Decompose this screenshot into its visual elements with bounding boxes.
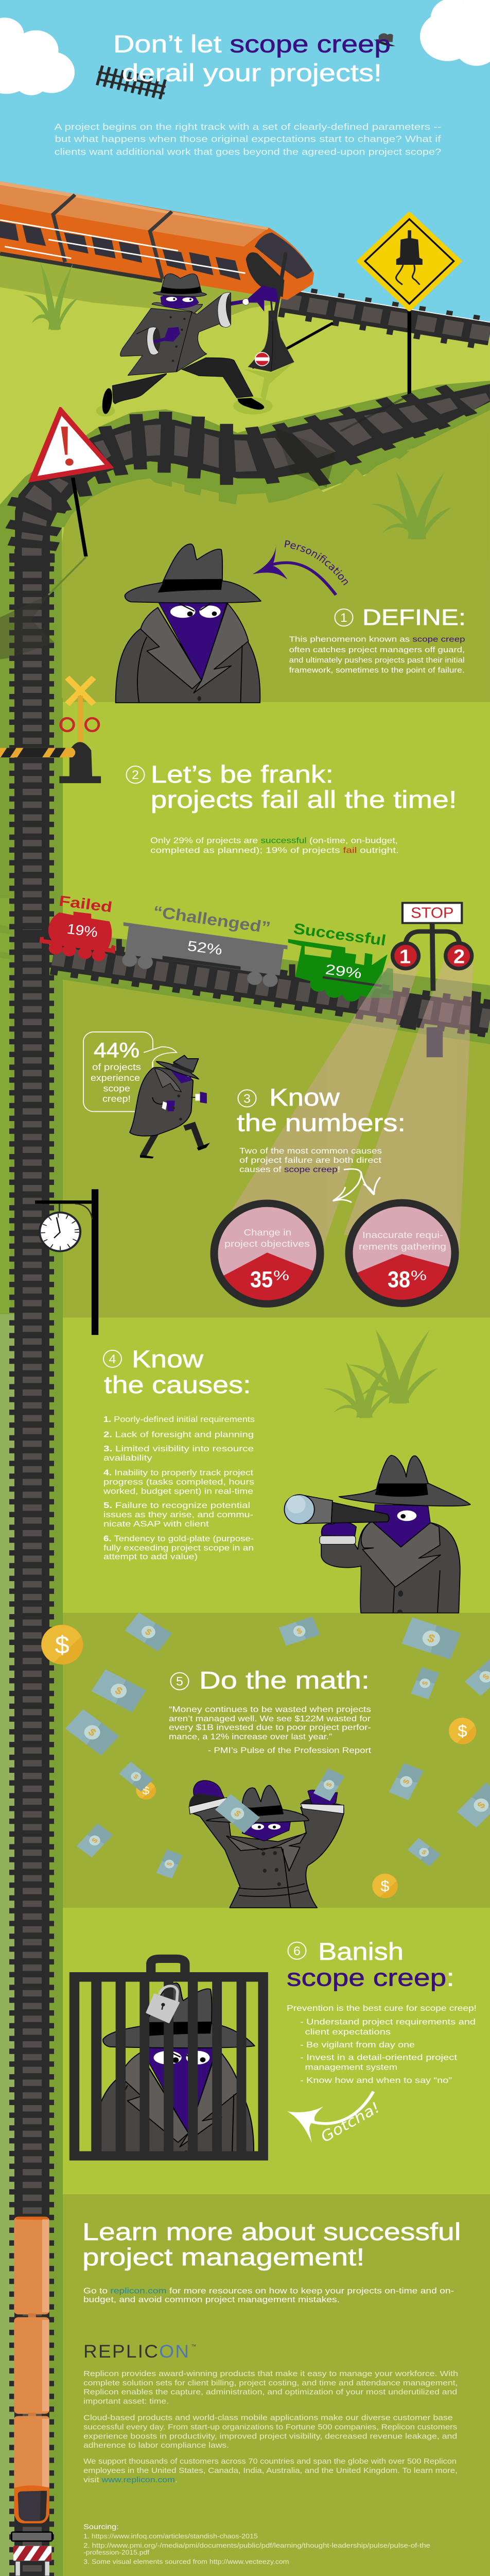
orange train [0,181,314,300]
stop signal [391,903,474,1057]
causes list: 1. Poorly-defined initial requirements [103,1415,255,1424]
gauge: inaccurate requirements gathering [345,1199,459,1307]
about Replicon: adherence to labor compliance laws. [83,2441,229,2450]
sourcing: 3. Some visual elements sourced from http://www.vecteezy.com [83,2558,289,2565]
frank body text [150,836,399,855]
about Replicon: Replicon enables the capture, administration, and optimization of your most underutilized and [83,2388,457,2396]
vertical train at track end [11,2217,52,2575]
causes list: 6. Tendency to gold-plate (purpose- [103,1534,254,1543]
prevention list: - Be vigilant from day one [300,2040,415,2049]
prevention list: - Invest in a detail-oriented project [300,2053,458,2062]
prevention list [287,2004,477,2085]
jailed spy [93,1983,255,2158]
prevention list: client expectations [305,2028,391,2037]
gotcha arrow [288,2092,373,2143]
clouds [0,0,490,95]
station clock [35,1189,98,1335]
about Replicon: important asset: time. [83,2397,169,2405]
closing heading [82,2218,461,2271]
heading 6: banish scope creep: Banish [318,1938,404,1965]
lower hill, shadow and left strip [0,381,490,706]
prevention list: - Know how and when to say “no” [300,2076,452,2085]
prevention list: - Understand project requirements and [300,2018,476,2026]
gauge: change in project objectives: 35 [250,1267,273,1292]
heading 6: banish scope creep [287,1938,454,1991]
heading 3: know the numbers: Know [269,1084,340,1111]
causes list: 3. Limited visibility into resource [103,1444,254,1453]
distant track [281,291,490,334]
heading 5: do the math: 5 [176,1675,183,1689]
prevention list: Prevention is the best cure for scope creep! [287,2004,477,2013]
gauge: change in project objectives [210,1199,324,1308]
train labels: Successful [292,921,387,949]
heading 2: let's be frank: 2 [132,769,139,782]
stop signal labels [399,905,465,968]
heading 5: do the math: Do the math: [199,1667,370,1694]
warning triangle sign [30,408,113,556]
train labels: Failed [58,893,113,916]
sourcing [83,2522,430,2565]
quote: - PMI’s Pulse of the Profession Report [208,1746,372,1755]
prevention list: management system [305,2063,397,2072]
about Replicon: employees in the United States, Canada, India, Australia, and the United Kingdom. To learn more, [83,2466,458,2475]
title: derail your projects! [122,59,382,87]
warning sign: derailed train [359,213,460,395]
heading 4: know the causes: Know [132,1346,204,1373]
causes list: progress (tasks completed, hours [103,1478,254,1486]
causes list: issues as they arise, and commu- [103,1510,253,1519]
title track icon [97,72,166,94]
title [113,31,391,87]
grass tufts: causes section [323,1330,437,1418]
speech bubble: 44%: 44% [94,1038,139,1062]
quote: mance, a 12% increase over last year.” [169,1732,332,1741]
about Replicon: Replicon provides award-winning products that make it easy to manage your workforce. With [83,2369,458,2378]
padlock [147,1986,179,2022]
stop signal labels: 1 [399,946,411,968]
white arrows to gauges [333,1169,380,1202]
sourcing: 1. https://www.infoq.com/articles/standish-chaos-2015 [83,2532,258,2540]
causes list [103,1415,255,1561]
speech bubble: 44%: experience [91,1072,140,1083]
define body text: often catches project managers off guard, [289,646,465,654]
gauge: inaccurate requirements gathering: % [411,1268,427,1283]
ground and foreground hills [0,252,490,561]
gauge: change in project objectives: % [273,1268,289,1283]
heading 3: know the numbers: the numbers: [237,1110,406,1137]
curved track [8,384,490,568]
gotcha label: Gotcha! [318,2099,383,2145]
causes list: nicate ASAP with client [103,1519,209,1529]
track band and diagonal track [0,925,490,1044]
speech bubble: 44%: creep! [102,1093,131,1104]
personification label: Personification [284,540,348,585]
spotlight beams [225,961,474,1251]
title hat icon [374,33,395,46]
spy front portrait [116,544,261,703]
heading 2: let's be frank: projects fail all the time! [151,786,457,814]
heading 3: know the numbers: 3 [243,1092,251,1106]
crossing barrier [0,677,101,783]
quote: every $1B invested due to poor project perfor- [169,1723,371,1732]
closing heading: Learn more about successful [82,2218,461,2246]
heading 3: know the numbers [237,1084,406,1137]
gauge: inaccurate requirements gathering: 38 [388,1267,410,1292]
stop signal labels: 2 [453,946,465,968]
speech bubble: 44%: scope [103,1083,130,1094]
track switch lever [244,254,333,401]
about Replicon: experience boosts in productivity, improved project visibility, decreased revenue leakage, and [83,2432,457,2441]
train car: challenged [116,922,295,987]
intro paragraph [55,122,442,157]
frank body text: Only 29% of projects are successful (on-time, on-budget, [150,836,398,845]
personification arrow [253,543,336,595]
falling money [65,1709,490,1898]
train percentages [66,921,363,981]
sourcing: Sourcing: [83,2522,119,2531]
heading 6: banish scope creep: scope creep : [287,1964,454,1991]
intro paragraph: A project begins on the right track with a set of clearly-defined parameters -- [55,122,441,132]
closing call to action: Go to replicon.com for more resources on how to keep your projects on-time and on- [83,2286,454,2295]
train percentages: 52% [186,938,223,958]
about Replicon: visit www.replicon.com . [83,2476,178,2484]
frank body text: completed as planned); 19% of projects fail outright. [150,846,399,855]
spy with telescope [284,1455,470,1614]
spy with arms raised [189,1781,344,1908]
stop signal labels: STOP [411,905,454,921]
heading 6: banish scope creep: 6 [293,1944,301,1958]
numbers body text: Two of the most common causes [239,1146,382,1156]
sky background [0,0,490,391]
about Replicon: complete solution sets for client billing, project costing, and time and attendance management, [83,2379,458,2387]
closing heading: project management! [82,2244,364,2271]
heading 2: let's be frank: Let’s be frank: [151,761,334,788]
gauge: inaccurate requirements gathering: rements gathering [359,1241,446,1252]
causes list: 5. Failure to recognize potential [103,1501,250,1510]
closing call to action [83,2286,454,2304]
about Replicon [83,2369,458,2484]
heading 1: define: DEFINE: [362,605,466,630]
define body text: and ultimately pushes projects past their initial [289,656,465,665]
causes list: 2. Lack of foresight and planning [103,1430,254,1439]
vertical track [9,549,54,2576]
grass tuft: define section [371,472,452,539]
sign shadow on ground [0,557,86,659]
speech bubble: 44% [83,1032,177,1111]
cast shadow of yellow sign on track [275,395,409,487]
about Replicon: Cloud-based products and world-class mobile applications make our diverse customer base [83,2414,453,2422]
closing call to action: budget, and avoid common project management mistakes. [83,2295,340,2304]
causes list: fully exceeding project scope in an [103,1544,254,1552]
causes list: 4. Inability to properly track project [103,1468,254,1477]
define body text: framework, sometimes to the point of failure. [289,666,465,675]
causes list: availability [103,1453,152,1463]
causes list: worked, budget spent) in real-time [103,1487,253,1496]
about Replicon: successful every day. From start-up organizations to Fortune 500 companies, Replicon customers [83,2423,457,2431]
intro paragraph: but what happens when those original expectations start to change? What if [55,133,442,144]
grass tuft [24,263,78,330]
causes list: attempt to add value) [103,1552,198,1561]
train percentages: 19% [66,921,99,940]
define body text [289,635,465,675]
walking spy [130,1055,210,1158]
title: Don’t let scope creep [113,31,391,58]
heading 2: let's be frank [127,761,457,814]
train labels [58,893,387,949]
intro paragraph: clients want additional work that goes beyond the agreed-upon project scope? [55,146,441,157]
heading 4: know the causes: 4 [109,1352,116,1366]
numbers body text: of project failure are both direct [239,1156,382,1165]
sourcing: 2. http://www.pmi.org/-/media/pmi/documents/public/pdf/learning/thought-leadership/pulse/pulse-of-the [83,2541,430,2549]
sourcing: -profession-2015.pdf [83,2549,150,2556]
gauge: inaccurate requirements gathering: Inaccurate requi- [362,1229,443,1240]
heading 1: define: 1 [340,612,347,625]
section backgrounds [0,698,490,2576]
train car: successful locomotive [288,939,393,1002]
spy running to lever [96,274,279,417]
Replicon logo: TM [191,2345,196,2348]
speech bubble: 44%: of projects [92,1061,141,1072]
gauge: change in project objectives: project objectives [224,1238,310,1249]
vertical track overlap at junction [9,924,54,962]
about Replicon: We support thousands of customers across 70 countries and span the globe with over 500 Replicon [83,2457,457,2466]
quote: “Money continues to be wasted when projects [169,1705,371,1714]
numbers body text [239,1146,382,1174]
quote [169,1705,372,1755]
train car: failed [39,911,116,961]
numbers body text: causes of scope creep ! [239,1165,340,1174]
Replicon logo: REPLICON [83,2341,189,2362]
gauge: change in project objectives: Change in [244,1227,291,1238]
coins and money section 5 upper [41,1613,490,1712]
train percentages: 29% [324,961,363,981]
quote: aren’t managed well. We see $122M wasted for [169,1714,371,1723]
heading 4: know the causes [103,1346,251,1399]
train labels: “Challenged” [152,903,272,937]
jail cage [69,1959,268,2160]
heading 4: know the causes: the causes: [104,1371,251,1399]
define body text: This phenomenon known as scope creep [289,635,465,643]
